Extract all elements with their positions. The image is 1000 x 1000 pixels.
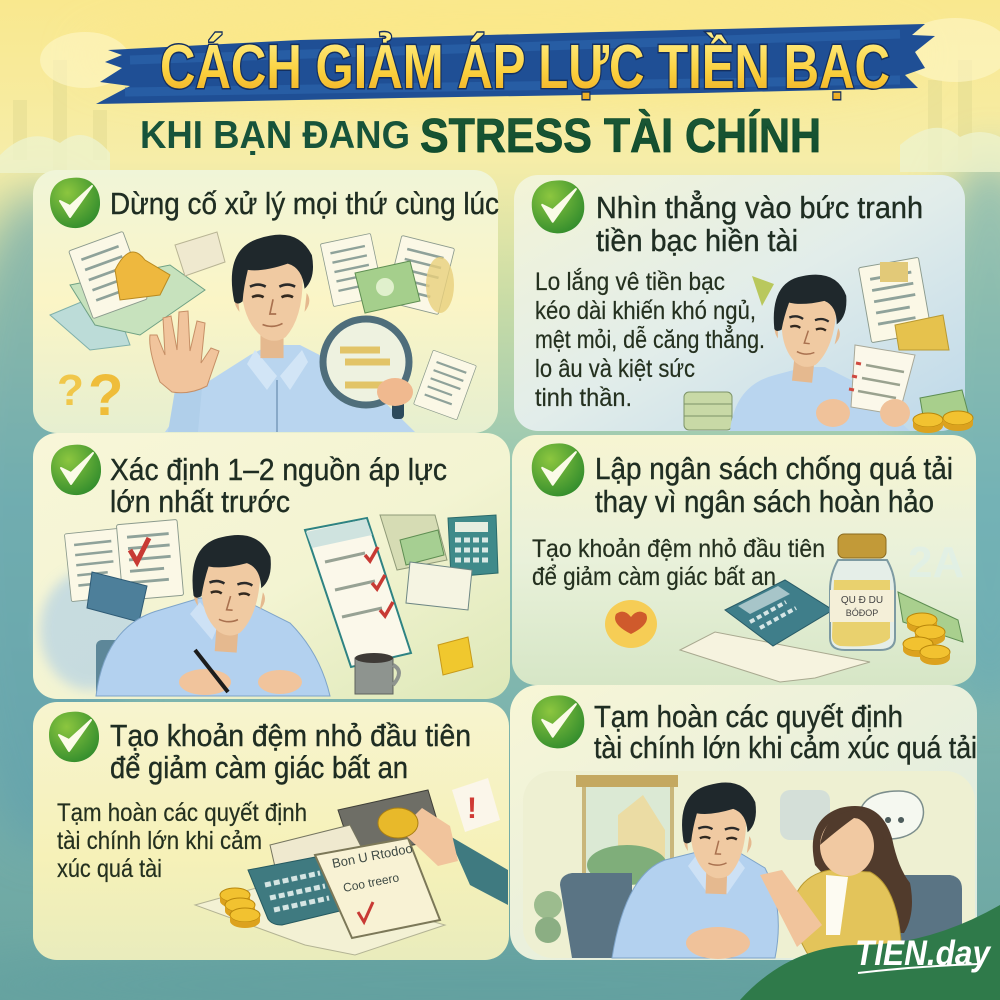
man listening <box>612 781 778 959</box>
calculator and coins <box>220 855 344 928</box>
body text 2 <box>535 267 765 412</box>
wallet and alert bubble: ! <box>467 792 477 825</box>
papers and money right <box>320 233 477 420</box>
heading 2: Nhìn thẳng vào bức tranh <box>596 189 923 225</box>
heading 3: lớn nhất trước <box>110 484 290 519</box>
subtitle: STRESS TÀI CHÍNH <box>420 109 821 163</box>
body text 2: Lo lắng vê tiền bạc <box>535 267 725 296</box>
panel 1: stop handling everything <box>33 170 499 433</box>
heading 3: Xác định 1–2 nguồn áp lực <box>110 452 447 487</box>
man reading list <box>730 270 915 431</box>
panel 4: overload-proof budget <box>512 435 976 685</box>
heading 4: thay vì ngân sách hoàn hảo <box>595 484 934 519</box>
forms and card left <box>64 519 184 622</box>
money, jar and coins: 2A <box>908 538 964 587</box>
scattered papers <box>195 880 445 955</box>
subtitle <box>140 109 821 163</box>
man with raised hand and magnifier <box>150 235 415 432</box>
logo hill <box>740 905 1000 1000</box>
heading 4: Lập ngân sách chống quá tải <box>595 451 953 486</box>
body text 2: tinh thần. <box>535 384 632 412</box>
check icon 5 <box>49 712 99 762</box>
sofa <box>560 873 962 958</box>
woman comforting <box>760 806 912 958</box>
magnifier <box>392 395 404 419</box>
raised hand <box>150 311 219 393</box>
heading 4 <box>595 451 953 519</box>
check icon 4 <box>532 443 584 496</box>
body text 5: Tạm hoàn các quyết định <box>57 799 307 827</box>
heading 5: Tạo khoản đệm nhỏ đầu tiên <box>110 718 471 753</box>
question marks: ? <box>88 363 123 428</box>
money stack and coins <box>684 390 973 433</box>
documents top right <box>858 257 949 350</box>
gold bar and mug <box>355 637 473 694</box>
heading 2: tiền bạc hiền tài <box>596 223 798 258</box>
hand holding gold <box>378 808 508 905</box>
money, jar and coins: QU Đ DU <box>841 595 883 606</box>
body text 4: để giảm càm giác bất an <box>532 563 776 591</box>
check icon 1 <box>50 178 100 228</box>
check icon 6 <box>532 695 584 748</box>
panel 5: first small buffer <box>33 702 509 960</box>
heading 3 <box>110 452 447 519</box>
money, jar and coins <box>830 534 964 665</box>
money, jar and coins: BÓĐOP <box>846 608 878 618</box>
heading 6: Tạm hoàn các quyết định <box>594 699 903 734</box>
body text 4: Tạo khoản đệm nhỏ đầu tiên <box>532 535 825 563</box>
body text 4 <box>532 535 825 591</box>
wallet and alert bubble <box>270 778 500 880</box>
papers and calculator <box>680 580 870 682</box>
body text 2: mệt mỏi, dễ căng thẳng. <box>535 324 765 354</box>
body text 2: lo âu và kiệt sức <box>535 355 695 383</box>
speech bubble <box>859 791 923 853</box>
body text 2: kéo dài khiến khó ngủ, <box>535 297 756 325</box>
heading 5 <box>110 718 471 785</box>
question marks: ? <box>57 366 84 415</box>
title banner <box>96 24 935 104</box>
papers pile left <box>50 231 225 350</box>
heading 5: để giảm càm giác bất an <box>110 750 408 785</box>
body text 5: tài chính lớn khi cảm <box>57 827 262 855</box>
heart emoji <box>605 600 657 648</box>
window and plants scene <box>523 771 975 958</box>
heading 2 <box>596 189 923 258</box>
panel 2: face the money picture <box>514 175 973 433</box>
checklist, calculator, money right <box>305 515 498 667</box>
question marks <box>57 363 123 428</box>
checklist note <box>315 838 440 938</box>
man writing at desk <box>96 532 330 696</box>
subtitle: KHI BẠN ĐANG <box>140 114 410 157</box>
checklist note: Bon U Rtodoo <box>331 841 414 871</box>
checklist note: Coo treero <box>342 870 401 895</box>
panel 3: identify 1-2 pressures <box>33 433 510 699</box>
body text 5: xúc quá tài <box>57 855 162 883</box>
heading 1: Dừng cố xử lý mọi thứ cùng lúc <box>110 186 499 221</box>
body text 5 <box>57 799 307 883</box>
check icon 3 <box>51 445 101 495</box>
heading 6 <box>594 699 977 765</box>
check icon 2 <box>532 180 584 233</box>
panel 6: postpone big decisions <box>510 685 977 960</box>
